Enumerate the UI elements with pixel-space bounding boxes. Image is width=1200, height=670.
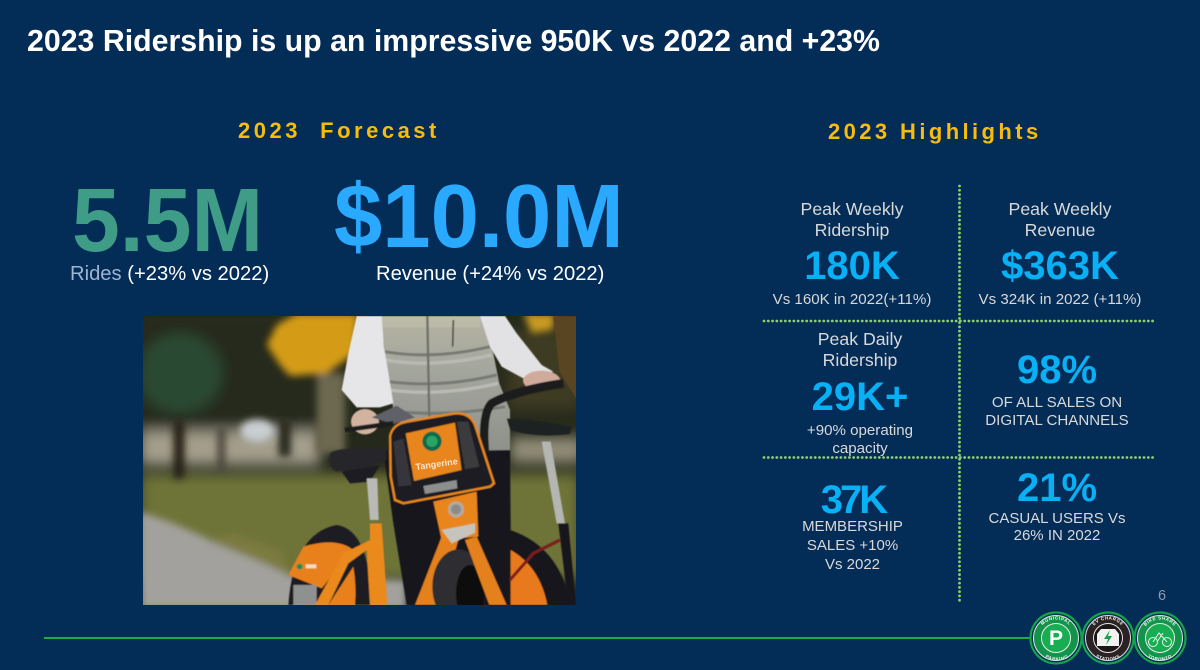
heading: 2023 Highlights: 2023 Highlights — [828, 119, 1042, 144]
label: Peak Daily — [818, 329, 902, 349]
label: Revenue — [1025, 220, 1095, 240]
note: MEMBERSHIP — [802, 518, 903, 535]
heading: 2023 Forecast: 2023 Forecast — [238, 118, 440, 143]
bike frame rear — [315, 523, 387, 605]
stat: revenue forecast — [334, 167, 624, 285]
logo: ev charge stations: STATIONS — [1096, 654, 1120, 660]
value: 5.5M: 5.5M — [72, 171, 263, 271]
note: SALES +10% — [807, 537, 898, 554]
value: $363K: $363K — [1001, 244, 1119, 288]
note — [988, 510, 1126, 544]
rear second bike — [507, 418, 572, 435]
logo: municipal parking: MUNICIPAL — [1040, 616, 1070, 625]
note: +90% operating — [807, 422, 913, 439]
logo: bike share toronto — [1134, 611, 1187, 665]
value: 37K: 37K — [821, 478, 885, 522]
caption: revenue: Revenue (+24% vs 2022) — [376, 263, 604, 285]
logo: bike share toronto: TORONTO — [1148, 654, 1172, 660]
Tangerine wordmark on basket: Tangerine — [415, 456, 458, 472]
logo: municipal parking — [1029, 611, 1082, 665]
label: Peak Weekly — [801, 199, 903, 219]
note: DIGITAL CHANNELS — [985, 412, 1129, 429]
photo: rider with orange bike share bicycle — [143, 316, 576, 605]
front wheel — [432, 549, 484, 624]
logo: municipal parking: PARKING — [1046, 654, 1068, 660]
highlight: casual users — [988, 466, 1126, 544]
label: Peak Weekly — [1009, 199, 1111, 219]
value: 21%: 21% — [1017, 466, 1097, 510]
logo: ev charge stations — [1082, 611, 1134, 665]
saddle — [329, 448, 387, 472]
sleeves — [342, 316, 393, 407]
note: OF ALL SALES ON — [992, 394, 1122, 411]
label — [1009, 199, 1112, 240]
note: 26% IN 2022 — [1014, 526, 1100, 544]
number keypad — [423, 480, 457, 494]
note: Vs 2022 — [825, 556, 880, 573]
front fork right leg and stem — [465, 537, 507, 605]
value: $10.0M: $10.0M — [334, 167, 624, 267]
value: 180K: 180K — [804, 244, 900, 288]
page number: 6 — [1158, 588, 1166, 604]
basket panel — [390, 413, 494, 503]
vest — [381, 316, 510, 452]
note: capacity — [832, 440, 888, 457]
legs — [383, 450, 511, 605]
logo: bike share toronto: BIKE SHARE — [1144, 616, 1176, 626]
label — [801, 199, 904, 240]
note — [802, 518, 903, 573]
value: 98%: 98% — [1017, 348, 1097, 392]
value: 29K+: 29K+ — [812, 375, 908, 419]
logo: ev charge stations: EV CHARGE — [1092, 616, 1124, 626]
highlight: peak daily ridership — [807, 329, 913, 457]
comparison: Vs 160K in 2022(+11%) — [773, 291, 931, 308]
note — [985, 394, 1129, 429]
highlight: membership sales — [802, 478, 903, 573]
highlight: peak weekly ridership — [772, 199, 931, 308]
note: CASUAL USERS Vs — [988, 510, 1126, 527]
brown jacket — [553, 316, 577, 399]
caption: rides: Rides (+23% vs 2022) — [70, 263, 269, 285]
label: Ridership — [815, 220, 889, 240]
label: Ridership — [823, 350, 897, 370]
logo: municipal parking: P — [1049, 627, 1063, 650]
highlight: digital sales — [985, 348, 1129, 429]
note — [807, 422, 913, 457]
highlight: peak weekly revenue — [978, 199, 1141, 308]
rear wheel and fender — [288, 525, 372, 605]
hands and gloves — [351, 409, 379, 434]
title: 2023 Ridership is up an impressive 950K vs 2022 and +23% — [27, 25, 880, 58]
comparison: Vs 324K in 2022 (+11%) — [979, 291, 1141, 308]
stat: rides forecast — [70, 171, 269, 285]
label — [818, 329, 902, 370]
front fork left leg — [415, 537, 458, 605]
handlebars — [345, 423, 393, 430]
